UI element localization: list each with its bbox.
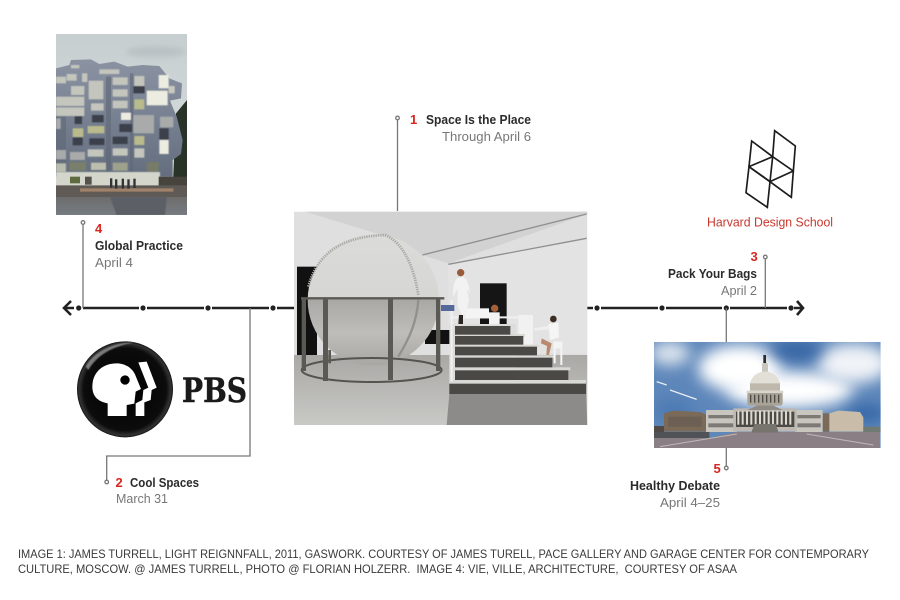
label: item 3: 3 bbox=[750, 249, 758, 264]
figures bbox=[441, 269, 562, 365]
photo: sphere installation bbox=[294, 212, 587, 425]
logo: Harvard Design School bbox=[707, 131, 833, 230]
label: item 5: April 4–25 bbox=[660, 495, 720, 510]
label: item 3 bbox=[668, 249, 758, 298]
PBS wordmark: PBS bbox=[182, 371, 247, 411]
stairs bbox=[447, 300, 587, 425]
label: item 3: April 2 bbox=[721, 283, 757, 298]
label: item 1: Space Is the Place bbox=[426, 112, 531, 127]
icon: Harvard mark bbox=[746, 131, 795, 207]
label: item 4: 4 bbox=[95, 221, 103, 236]
connector: item 5 bbox=[724, 308, 728, 470]
label: item 2 bbox=[116, 475, 199, 506]
connector: item 4 bbox=[81, 221, 85, 308]
label: item 1: Through April 6 bbox=[442, 129, 531, 144]
label: item 4 bbox=[95, 221, 183, 270]
logo: PBS bbox=[77, 341, 247, 437]
photo: apartment building bbox=[56, 34, 187, 215]
label: item 5 bbox=[630, 461, 721, 510]
label: item 5: 5 bbox=[714, 461, 721, 476]
label: item 2: March 31 bbox=[116, 491, 168, 506]
image credits bbox=[18, 547, 869, 576]
label: item 4: Global Practice bbox=[95, 238, 183, 253]
connector: item 2 bbox=[105, 308, 250, 484]
label: item 1: 1 bbox=[410, 112, 417, 127]
label: item 1 bbox=[410, 112, 531, 144]
capitol wings bbox=[664, 410, 863, 432]
connector: item 3 bbox=[764, 255, 767, 308]
label: item 2: 2 bbox=[116, 475, 123, 490]
icon: PBS heads bbox=[77, 341, 173, 437]
connector: item 1 bbox=[396, 116, 399, 211]
photo: US Capitol bbox=[650, 342, 890, 448]
timeline bbox=[64, 301, 803, 315]
school name: Harvard Design School bbox=[707, 214, 833, 230]
label: item 4: April 4 bbox=[95, 255, 133, 270]
label: item 2: Cool Spaces bbox=[130, 475, 199, 490]
capitol centre and dome bbox=[733, 355, 797, 433]
image credits: CULTURE, MOSCOW. @ JAMES TURRELL, PHOTO @ FLORIAN HOLZERR. IMAGE 4: VIE, VILLE, ARCHITECTURE, COURTESY OF ASAA bbox=[18, 562, 737, 576]
sphere bbox=[301, 234, 444, 382]
label: item 5: Healthy Debate bbox=[630, 478, 720, 493]
label: item 3: Pack Your Bags bbox=[668, 266, 757, 281]
